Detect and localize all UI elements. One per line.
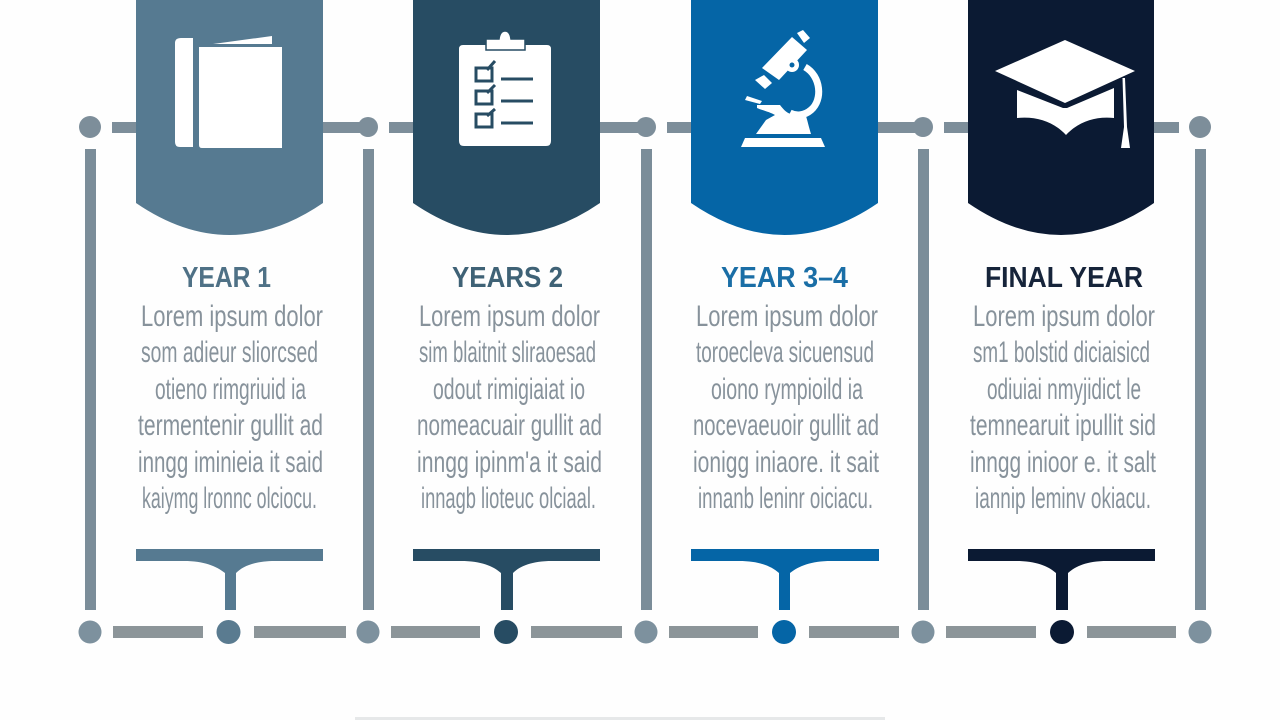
final year body text: odiuiai nmyjidict le: [987, 373, 1141, 406]
years 2 body text: inngg ipinm'a it said: [417, 446, 602, 479]
year 1 heading: YEAR 1: [182, 262, 271, 294]
panel: year 1: [136, 0, 323, 610]
year 3-4 body text: oiono rympioild ia: [711, 373, 863, 406]
years 2 body text: odout rimigiaiat io: [433, 373, 585, 406]
years 2 heading: YEARS 2: [452, 262, 563, 294]
final year banner: [968, 0, 1154, 235]
final year body text: iannip leminv okiacu.: [975, 482, 1151, 515]
year 1 body text: Lorem ipsum dolor: [141, 300, 323, 333]
final year connector: [968, 549, 1155, 610]
years 2 banner: [413, 0, 600, 235]
final year body text: sm1 bolstid diciaisicd: [973, 336, 1150, 369]
vertical column dividers: [85, 149, 1206, 610]
year 1 banner: [136, 0, 323, 235]
year 3-4 body text: innanb leninr oiciacu.: [698, 482, 873, 515]
icon: book: [175, 36, 282, 148]
year 1 body text: otieno rimgriuid ia: [155, 373, 306, 406]
year 3-4 body text: toroecleva sicuensud: [696, 336, 874, 369]
top timeline rail: [79, 116, 1211, 138]
year 3-4 heading: YEAR 3–4: [721, 262, 848, 294]
panel: years 2: [413, 0, 602, 610]
years 2 body text: innagb lioteuc olciaal.: [421, 482, 596, 515]
icon: microscope: [741, 30, 825, 147]
icon: graduation cap: [995, 40, 1135, 148]
bottom timeline rail: [78, 620, 1212, 644]
year 1 body text: kaiymg lronnc olciocu.: [142, 482, 317, 515]
icon: clipboard checklist: [459, 31, 551, 146]
year 3-4 body text: ionigg iniaore. it sait: [693, 446, 879, 479]
year 1 body text: termentenir gullit ad: [138, 409, 323, 442]
final year body text: Lorem ipsum dolor: [973, 300, 1155, 333]
years 2 body text: sim blaitnit sliraoesad: [419, 336, 596, 369]
final year body text: inngg inioor e. it salt: [970, 446, 1156, 479]
year 1 body text: [138, 300, 323, 515]
year 3-4 connector: [691, 549, 879, 610]
final year heading: FINAL YEAR: [985, 262, 1143, 294]
final year body text: [970, 300, 1156, 515]
panel: year 3-4: [691, 0, 879, 610]
years 2 body text: nomeacuair gullit ad: [417, 409, 602, 442]
year 1 connector: [136, 549, 323, 610]
year 3-4 banner: [691, 0, 878, 235]
years 2 body text: [417, 300, 602, 515]
year 1 body text: inngg iminieia it said: [138, 446, 323, 479]
final year body text: temnearuit ipullit sid: [970, 409, 1156, 442]
years 2 connector: [413, 549, 600, 610]
panel: final year: [968, 0, 1156, 610]
year 1 body text: som adieur sliorcsed: [141, 336, 318, 369]
year 3-4 body text: [693, 300, 879, 515]
year 3-4 body text: nocevaeuoir gullit ad: [693, 409, 879, 442]
years 2 body text: Lorem ipsum dolor: [419, 300, 600, 333]
year 3-4 body text: Lorem ipsum dolor: [696, 300, 878, 333]
